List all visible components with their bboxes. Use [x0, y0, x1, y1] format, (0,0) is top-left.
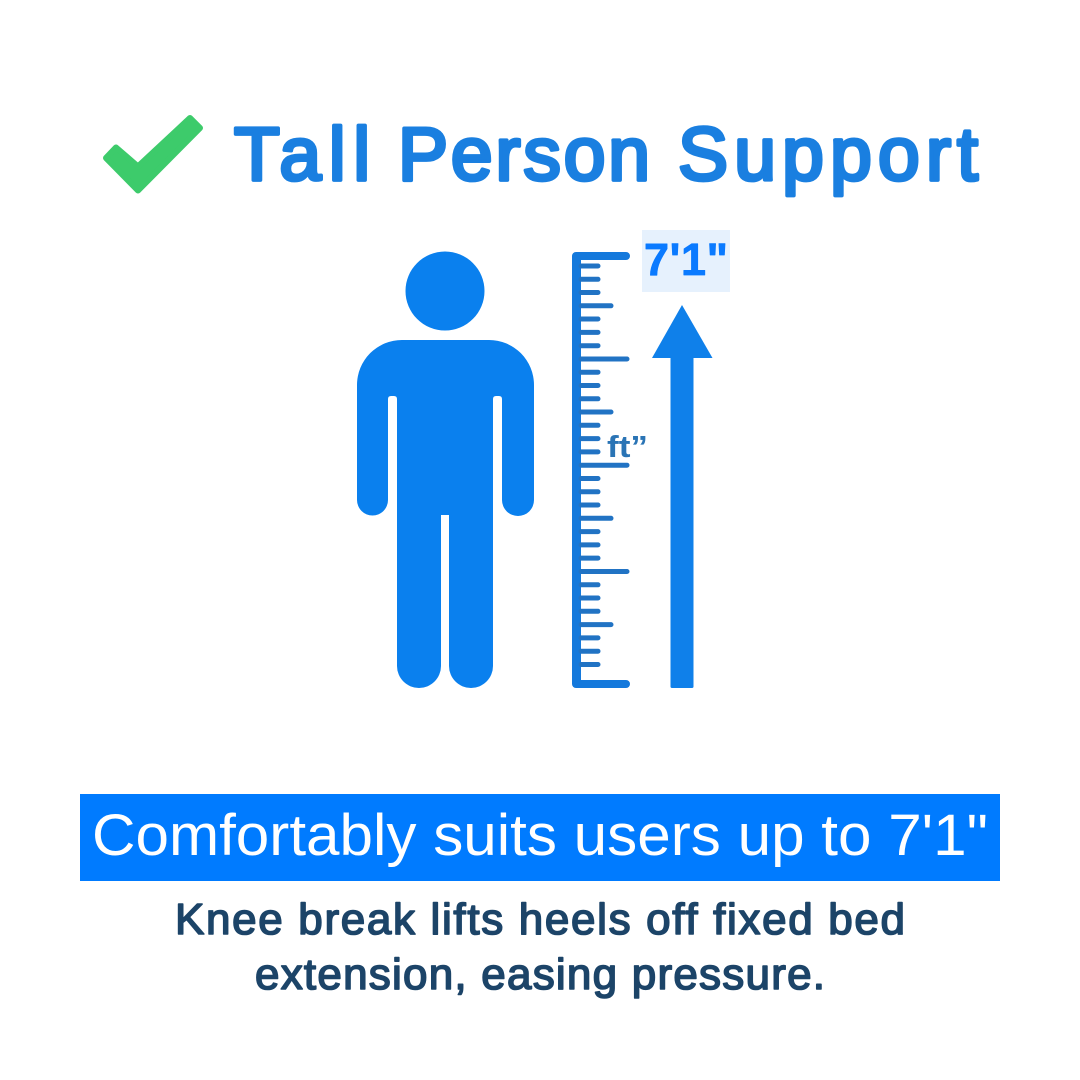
description text: [175, 895, 905, 999]
description text: Knee break lifts heels off fixed bed: [175, 895, 905, 944]
banner: Comfortably suits users up to 7'1": [92, 803, 988, 868]
ruler unit label: ft”: [607, 429, 648, 464]
title: Support: [678, 112, 978, 196]
height ruler: [572, 252, 648, 688]
title: Person: [398, 112, 650, 196]
icon: standing person: [357, 252, 534, 688]
icon: green check mark: [106, 118, 200, 190]
heading row: [106, 112, 978, 196]
height value badge: 7'1": [644, 234, 728, 285]
description text: extension, easing pressure.: [255, 950, 825, 999]
arrow: upward: [652, 305, 712, 688]
title: Tall: [234, 112, 370, 196]
